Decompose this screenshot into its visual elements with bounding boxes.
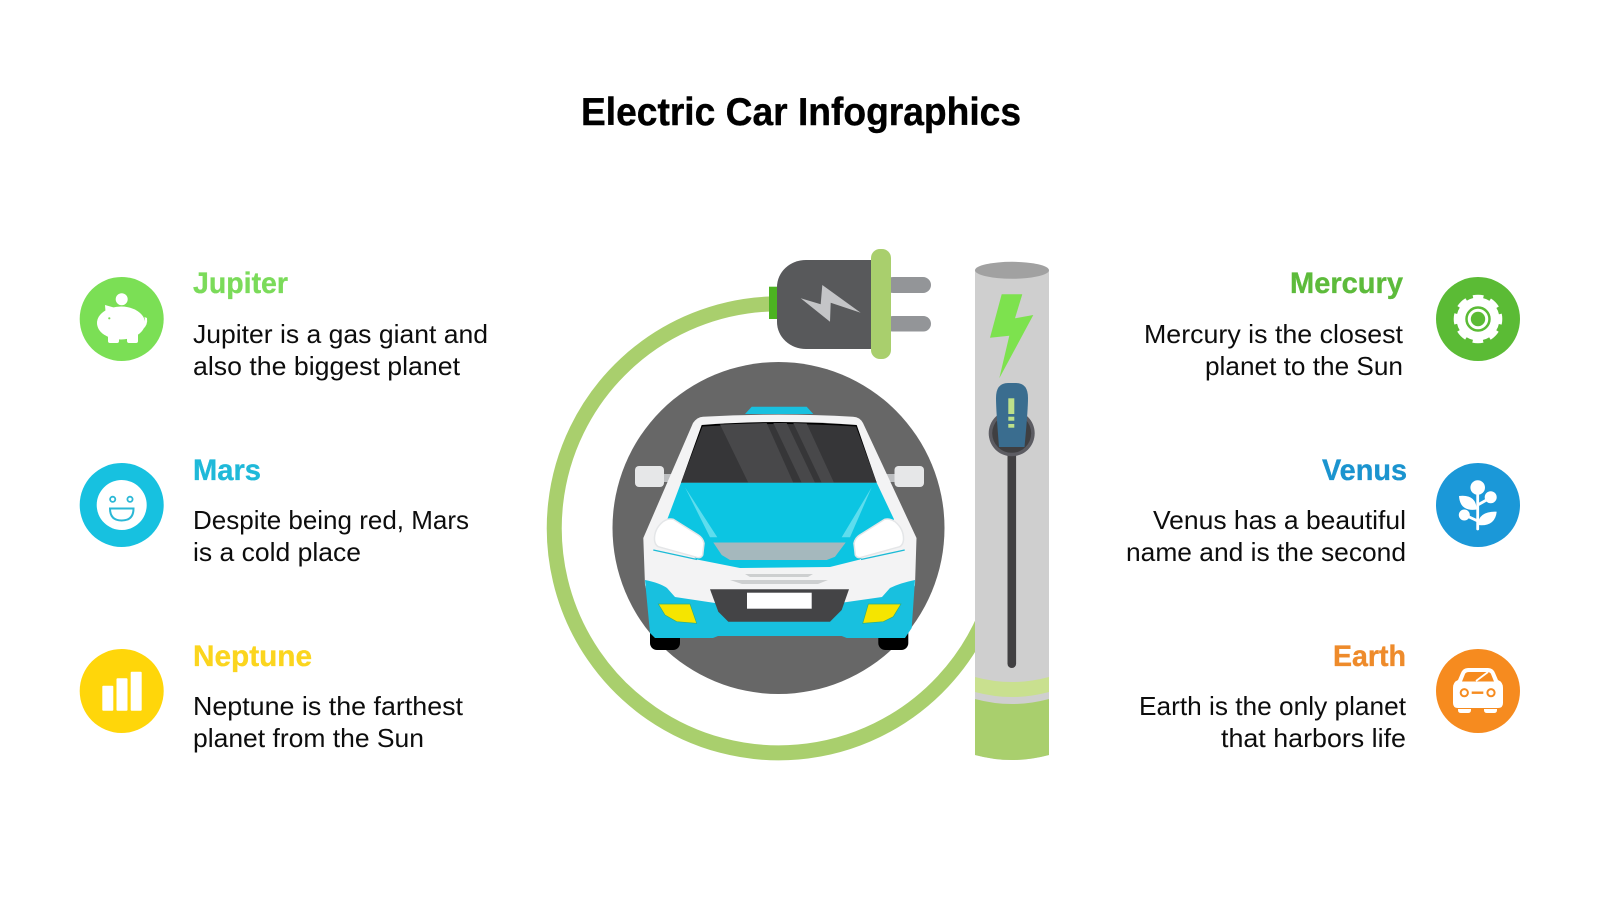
car body — [643, 415, 916, 620]
lower grille — [710, 589, 849, 622]
charging pole — [975, 262, 1049, 760]
text: Mercury description: planet to the Sun — [1205, 351, 1403, 381]
illustration: charging car — [554, 249, 1049, 760]
text: Earth description: that harbors life — [1221, 723, 1406, 753]
text: Venus description: Venus has a beautiful — [1153, 505, 1406, 535]
cable ring — [554, 304, 985, 753]
car — [635, 407, 924, 650]
heading: Earth: Earth — [1333, 640, 1406, 673]
text: Venus description: name and is the second — [1126, 537, 1406, 567]
panel: Mercury — [1144, 267, 1520, 381]
panel: Mars — [80, 454, 469, 567]
text: Jupiter description — [193, 319, 488, 381]
text: Venus description — [1126, 505, 1406, 567]
text: Neptune description — [193, 691, 464, 753]
text: Mars description: Despite being red, Mars — [193, 505, 469, 535]
hood creases — [685, 487, 872, 537]
text: Mercury description — [1144, 319, 1404, 381]
grille marks — [730, 574, 828, 584]
icon: car — [1436, 649, 1520, 733]
panel: Earth — [1139, 640, 1520, 753]
vent — [713, 542, 846, 560]
text: Jupiter description: Jupiter is a gas giant and — [193, 319, 488, 349]
heading: Jupiter: Jupiter — [193, 267, 288, 300]
windshield — [681, 422, 877, 483]
roof — [745, 407, 813, 414]
title: Electric Car Infographics — [581, 91, 1021, 134]
text: Neptune description: planet from the Sun — [193, 723, 424, 753]
mirrors — [635, 466, 924, 487]
lower bumper — [645, 580, 915, 638]
heading: Mercury: Mercury — [1290, 267, 1403, 300]
icon: plant — [1436, 463, 1520, 547]
text: Mars description: is a cold place — [193, 537, 361, 567]
text: Mercury description: Mercury is the closest — [1144, 319, 1404, 349]
fog lights — [658, 604, 901, 623]
text: Jupiter description: also the biggest planet — [193, 351, 461, 381]
heading: Neptune: Neptune — [193, 640, 312, 673]
text: Neptune description: Neptune is the farthest — [193, 691, 464, 721]
text: Earth description: Earth is the only planet — [1139, 691, 1407, 721]
text: Earth description — [1139, 691, 1407, 753]
dark circle behind car — [612, 362, 944, 694]
headlights — [654, 519, 904, 558]
hood accent lines — [653, 550, 905, 560]
panel: Jupiter — [80, 267, 488, 381]
icon: gear — [1436, 277, 1520, 361]
heading: Mars: Mars — [193, 454, 261, 487]
license plate — [747, 593, 812, 609]
icon: smiley face — [80, 463, 164, 547]
text: Mars description — [193, 505, 469, 567]
plug — [769, 249, 931, 359]
hood — [667, 483, 894, 568]
icon: bar chart — [80, 649, 164, 733]
icon: piggy bank — [80, 277, 164, 361]
heading: Venus: Venus — [1322, 454, 1407, 487]
panel: Venus — [1126, 454, 1520, 567]
wheels — [650, 625, 908, 650]
panel: Neptune — [80, 640, 464, 753]
